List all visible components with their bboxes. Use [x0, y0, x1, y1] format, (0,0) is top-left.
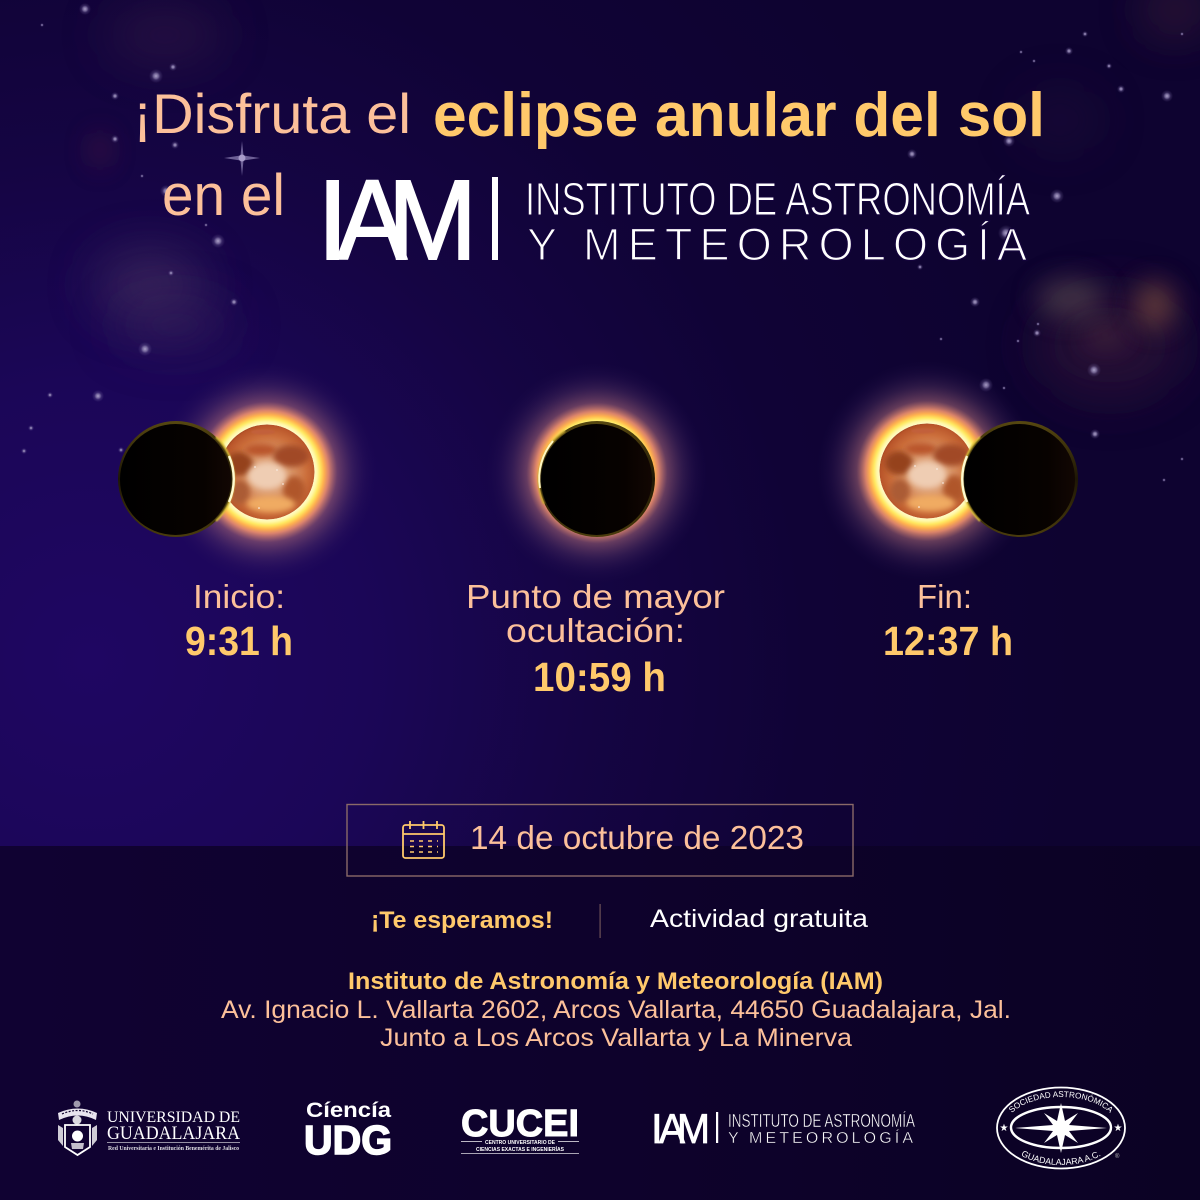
- logo: Sociedad Astronomica de Guadalajara: SOCIEDAD ASTRONÓMICA: [1009, 1091, 1112, 1113]
- IAM logo, large: I: [317, 157, 348, 283]
- address block: [221, 968, 1011, 1052]
- IAM logo, large: INSTITUTO DE ASTRONOMÍA: [525, 173, 1030, 225]
- logo: IAM, small: A: [659, 1105, 685, 1152]
- label: inicio: 9:31 h: [185, 618, 293, 664]
- icon: compass star: [1015, 1103, 1107, 1153]
- label: punto de mayor ocultacion: Punto de mayor: [466, 578, 725, 615]
- logo: Universidad de Guadalajara: [58, 1100, 240, 1155]
- label: punto de mayor ocultacion: 10:59 h: [533, 654, 666, 700]
- logo: IAM, small: I: [651, 1105, 663, 1152]
- eclipse: inicio: [118, 362, 377, 582]
- invitation line: [371, 904, 868, 938]
- logo: IAM, small: [651, 1105, 915, 1152]
- label: punto de mayor ocultacion: [466, 578, 725, 700]
- logo: Sociedad Astronomica de Guadalajara: GUADALAJARA A.C.: [1022, 1151, 1100, 1165]
- title: [133, 81, 1045, 228]
- logo: Universidad de Guadalajara: UNIVERSIDAD DE: [107, 1109, 240, 1126]
- IAM logo, large: M: [388, 157, 477, 283]
- sparkle star: [224, 141, 260, 176]
- IAM logo, large: [317, 157, 1030, 283]
- logo: Sociedad Astronomica de Guadalajara: ★: [1114, 1123, 1123, 1134]
- label: punto de mayor ocultacion: ocultación:: [506, 612, 685, 649]
- title: second line: en el: [162, 163, 285, 228]
- icon: calendar: [403, 821, 444, 858]
- logo: Sociedad Astronomica de Guadalajara: [996, 1086, 1126, 1170]
- logo: Sociedad Astronomica de Guadalajara: ®: [1115, 1153, 1120, 1160]
- logo: IAM, small: M: [677, 1105, 710, 1152]
- eclipse: fin: [817, 361, 1078, 581]
- label: inicio: Inicio:: [193, 578, 285, 615]
- title: first line, light: ¡Disfruta el: [133, 82, 411, 145]
- eclipse: punto de mayor ocultacion: [487, 363, 707, 583]
- logo: CUCEI: CENTRO UNIVERSITARIO DE: [485, 1140, 555, 1146]
- logo: Universidad de Guadalajara: GUADALAJARA: [107, 1123, 240, 1144]
- label: fin: Fin:: [917, 578, 972, 615]
- logo: Ciencia UDG: UDG: [304, 1117, 392, 1163]
- date box: [347, 804, 853, 876]
- address block: Instituto de Astronomía y Meteorología (IAM): [348, 968, 883, 995]
- label: inicio: [185, 578, 293, 664]
- logo: IAM, small: INSTITUTO DE ASTRONOMÍA: [728, 1111, 915, 1131]
- logo: Universidad de Guadalajara: Red Universitaria e Institución Benemérita de Jalisco: [108, 1145, 239, 1152]
- stars: [21, 3, 1184, 482]
- IAM logo, large: Y METEOROLOGÍA: [527, 219, 1027, 270]
- address block: Av. Ignacio L. Vallarta 2602, Arcos Vallarta, 44650 Guadalajara, Jal.: [221, 996, 1011, 1024]
- logo: Sociedad Astronomica de Guadalajara: ★: [1000, 1123, 1009, 1134]
- IAM logo, large: A: [337, 157, 408, 283]
- logo: CUCEI: CUCEI: [461, 1103, 579, 1145]
- logo: Ciencia UDG: Cíencía: [306, 1099, 391, 1122]
- date text: 14 de octubre de 2023: [470, 819, 804, 856]
- label: fin: 12:37 h: [883, 618, 1013, 664]
- logo: CUCEI: CIENCIAS EXACTAS E INGENIERÍAS: [476, 1145, 564, 1153]
- address block: Junto a Los Arcos Vallarta y La Minerva: [380, 1024, 852, 1052]
- invitation line: ¡Te esperamos!: [371, 907, 553, 934]
- logo: IAM, small: Y METEOROLOGÍA: [728, 1128, 913, 1147]
- label: fin: [883, 578, 1013, 664]
- icon: crest: [58, 1100, 97, 1155]
- invitation line: Actividad gratuita: [650, 905, 868, 933]
- title: first line, bold: eclipse anular del sol: [433, 81, 1045, 150]
